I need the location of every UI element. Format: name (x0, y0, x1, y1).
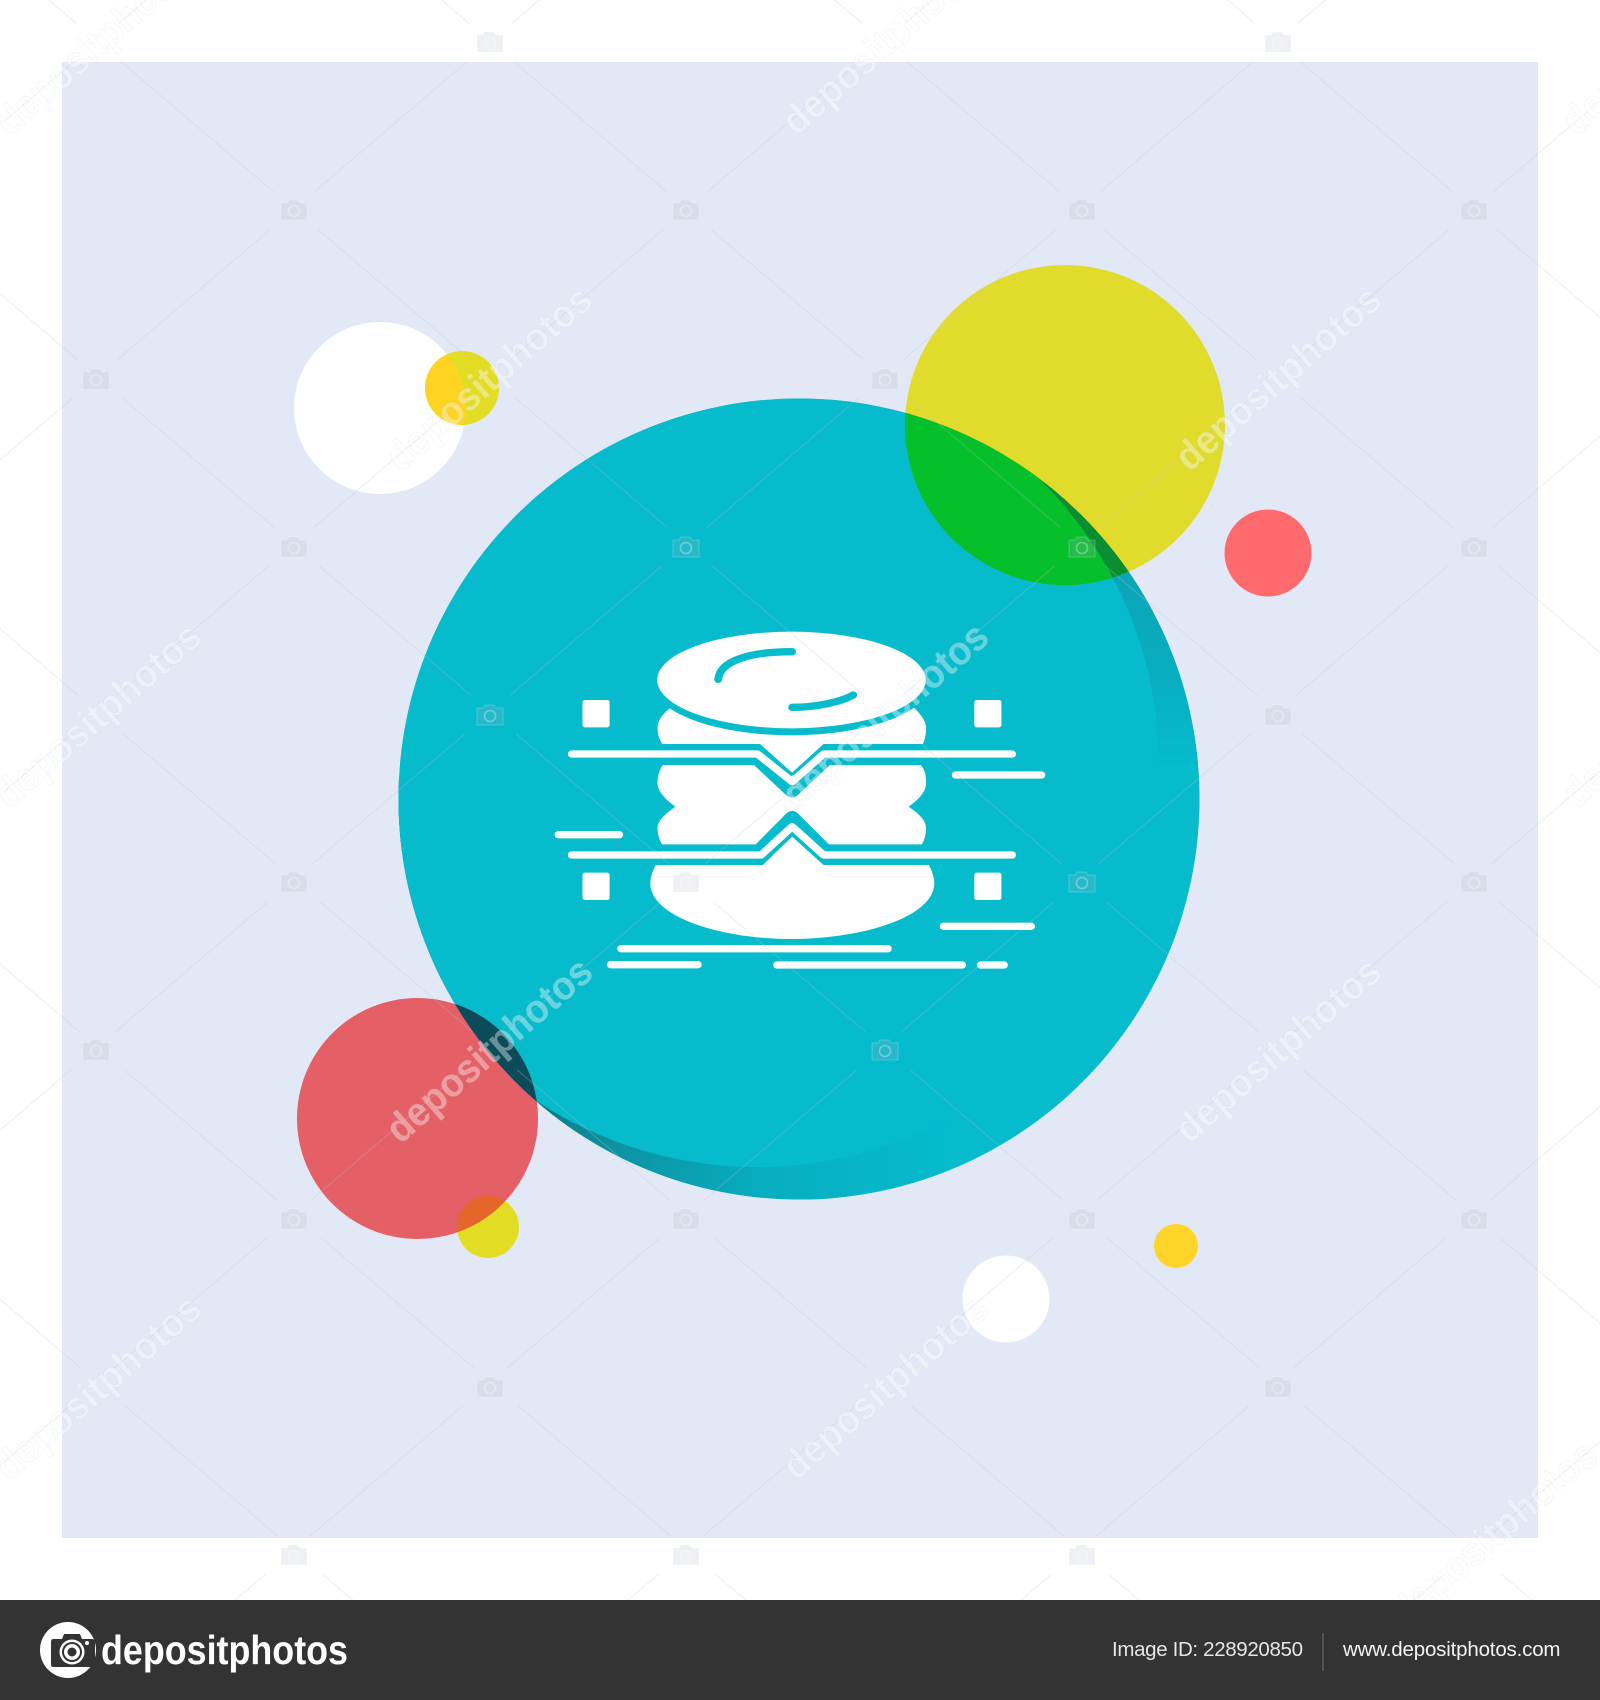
watermark: depositphotos text repeats: depositphotos (1167, 949, 1390, 1151)
corner squares (582, 700, 1001, 900)
watermark: camera marks (83, 32, 1487, 1565)
watermark: depositphotos text repeats: depositphotos (378, 949, 601, 1151)
icon: database stack glyph (559, 629, 1041, 965)
decorative circle: large red with dark overlap and yellow dot (297, 998, 538, 1258)
separator (1322, 1633, 1324, 1671)
decorative circle: large white with yellow dot (294, 322, 499, 494)
logo wordmark: depositphotos (101, 1627, 348, 1673)
main teal circle with shadow crescent (398, 398, 1200, 1200)
bottom disk (650, 837, 934, 939)
footer bar (0, 1600, 1600, 1700)
watermark: depositphotos text repeats: depositphotos (774, 1286, 997, 1488)
icon: depositphotos camera logo (40, 1622, 96, 1678)
website address: www.depositphotos.com (1342, 1638, 1560, 1661)
decorative circle: small white (962, 1256, 1050, 1342)
decorative circle: small coral (1224, 510, 1312, 596)
top disk (651, 629, 931, 735)
image id: Image ID: 228920850 (1112, 1638, 1303, 1661)
middle disk layer (657, 765, 926, 844)
watermark: depositphotos text repeats: depositphotos (774, 614, 997, 816)
connector lines (559, 754, 1041, 965)
decorative circle: large yellow with green overlap (905, 265, 1225, 585)
second disk layer (657, 707, 926, 773)
watermark: depositphotos text repeats: depositphotos (378, 277, 601, 479)
watermark: depositphotos text repeats: depositphotos (1167, 277, 1390, 479)
decorative circle: small yellow (1154, 1224, 1198, 1268)
